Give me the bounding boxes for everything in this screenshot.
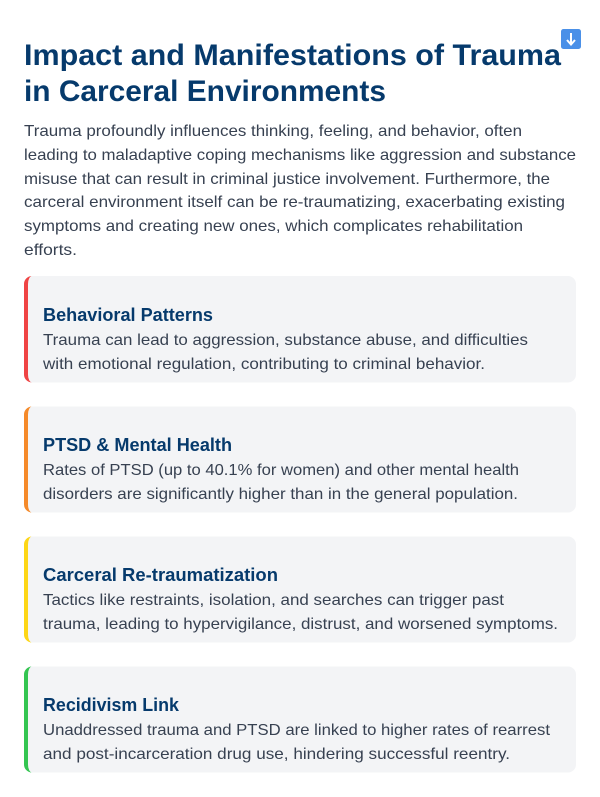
icon: down arrow — [561, 29, 581, 49]
title: in Carceral Environments — [24, 75, 386, 108]
heading: behavioral patterns: Behavioral Patterns — [43, 305, 213, 325]
intro paragraph: efforts. — [24, 242, 77, 259]
panel: carceral re-traumatization — [24, 536, 576, 642]
heading: PTSD and mental health: PTSD & Mental Health — [43, 435, 232, 455]
text: carceral re-traumatization: trauma, leading to hypervigilance, distrust, and worsened symptoms. — [43, 616, 558, 633]
text: recidivism link — [43, 722, 551, 763]
title — [24, 39, 561, 108]
intro paragraph: misuse that can result in criminal justice involvement. Furthermore, the — [24, 171, 550, 188]
text: behavioral patterns — [42, 332, 528, 373]
text: PTSD and mental health: disorders are significantly higher than in the general population. — [43, 486, 518, 503]
text: PTSD and mental health: Rates of PTSD (up to 40.1% for women) and other mental health — [43, 462, 519, 479]
text: recidivism link: Unaddressed trauma and PTSD are linked to higher rates of rearrest — [43, 722, 551, 739]
panel: PTSD and mental health — [24, 406, 576, 512]
intro paragraph: carceral environment itself can be re-traumatizing, exacerbating existing — [24, 194, 565, 211]
title: Impact and Manifestations of Trauma — [24, 39, 561, 72]
intro paragraph — [24, 123, 576, 259]
panel: behavioral patterns — [24, 276, 576, 382]
panel: recidivism link — [24, 666, 576, 772]
intro paragraph: leading to maladaptive coping mechanisms like aggression and substance — [24, 147, 576, 164]
heading: carceral re-traumatization: Carceral Re-traumatization — [43, 565, 278, 585]
text: behavioral patterns: with emotional regulation, contributing to criminal behavior. — [42, 356, 485, 373]
text: recidivism link: and post-incarceration drug use, hindering successful reentry. — [43, 746, 510, 763]
heading: recidivism link: Recidivism Link — [43, 695, 180, 715]
text: carceral re-traumatization — [43, 592, 558, 633]
intro paragraph: symptoms and creating new ones, which complicates rehabilitation — [24, 218, 523, 235]
text: behavioral patterns: Trauma can lead to aggression, substance abuse, and difficulties — [43, 332, 528, 349]
intro paragraph: Trauma profoundly influences thinking, feeling, and behavior, often — [24, 123, 522, 140]
text: carceral re-traumatization: Tactics like restraints, isolation, and searches can trigger past — [43, 592, 505, 609]
text: PTSD and mental health — [43, 462, 519, 503]
